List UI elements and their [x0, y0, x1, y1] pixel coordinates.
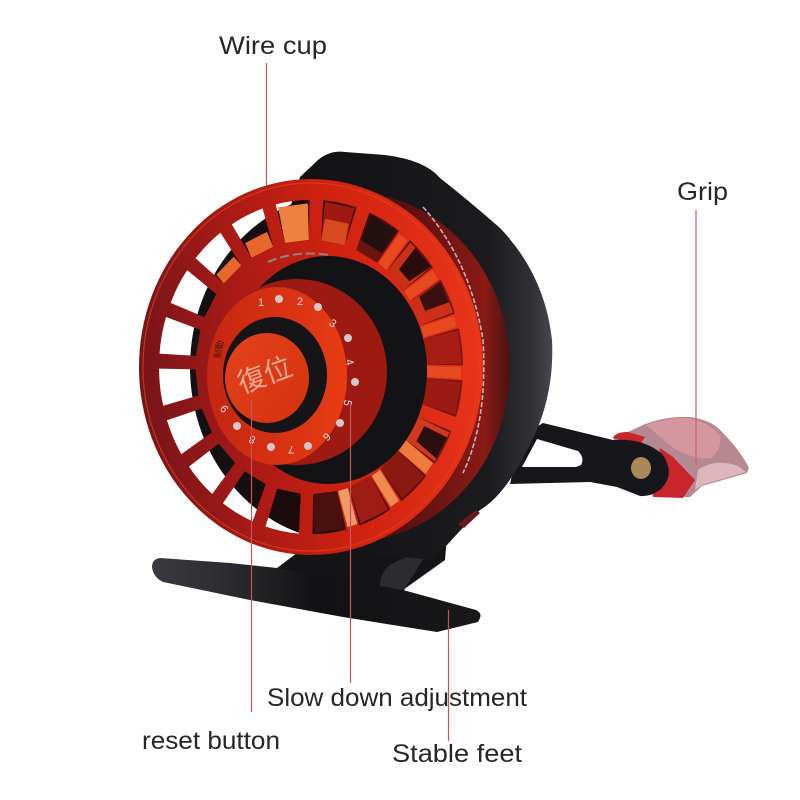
- dial scale numbers: 2: [297, 296, 303, 308]
- dial scale numbers: 8: [247, 432, 257, 446]
- illustration: fishing reel: [139, 152, 749, 632]
- black hub: [229, 256, 427, 484]
- grip lower lobe: [695, 463, 746, 490]
- coloured glimpses through ring windows: [216, 202, 462, 533]
- label: grip: Grip: [677, 178, 728, 206]
- label: slow down adjustment: Slow down adjustment: [267, 684, 527, 712]
- dial scale numbers: 3: [326, 317, 338, 330]
- body knurl: [458, 510, 480, 528]
- dial scale numbers: 1: [258, 297, 264, 309]
- grip: [613, 417, 749, 498]
- dial scale numbers: 9: [218, 402, 231, 415]
- leader line: slow down adjustment: [350, 403, 352, 683]
- grip red band: [613, 432, 695, 498]
- dial scale dots: [233, 295, 359, 451]
- leader line: grip: [695, 210, 697, 465]
- hole in handle arm: [522, 439, 582, 467]
- black collar: [223, 317, 327, 433]
- leader line: wire cup: [266, 63, 268, 186]
- dial face: [207, 287, 347, 465]
- dial scale numbers: 5: [341, 399, 353, 407]
- dial scale numbers: [218, 296, 356, 455]
- label: reset button: reset button: [142, 727, 280, 755]
- reel body: [260, 152, 552, 560]
- leader line: reset button: [250, 400, 252, 712]
- dial scale numbers: 7: [288, 443, 294, 455]
- label: wire cup: Wire cup: [219, 32, 327, 60]
- dial side mark: 制動: [211, 339, 227, 359]
- spool behind the ring: [190, 192, 510, 542]
- reset button: [225, 333, 309, 423]
- handle arm: [510, 423, 669, 496]
- label: stable feet: Stable feet: [392, 740, 522, 768]
- leader line: stable feet: [448, 610, 450, 741]
- dial scale numbers: 4: [342, 358, 356, 367]
- button characters: 復位: [231, 345, 297, 402]
- grip upper lobe: [646, 418, 720, 458]
- hub dashed highlight: [268, 254, 330, 262]
- wire cup ring: [139, 179, 484, 555]
- bright spokes: [338, 234, 461, 527]
- silver rim edge: [423, 207, 484, 473]
- dial knob: [207, 279, 387, 465]
- reel foot: [152, 530, 480, 632]
- handle rivet: [631, 457, 651, 479]
- dial scale numbers: 6: [320, 430, 333, 443]
